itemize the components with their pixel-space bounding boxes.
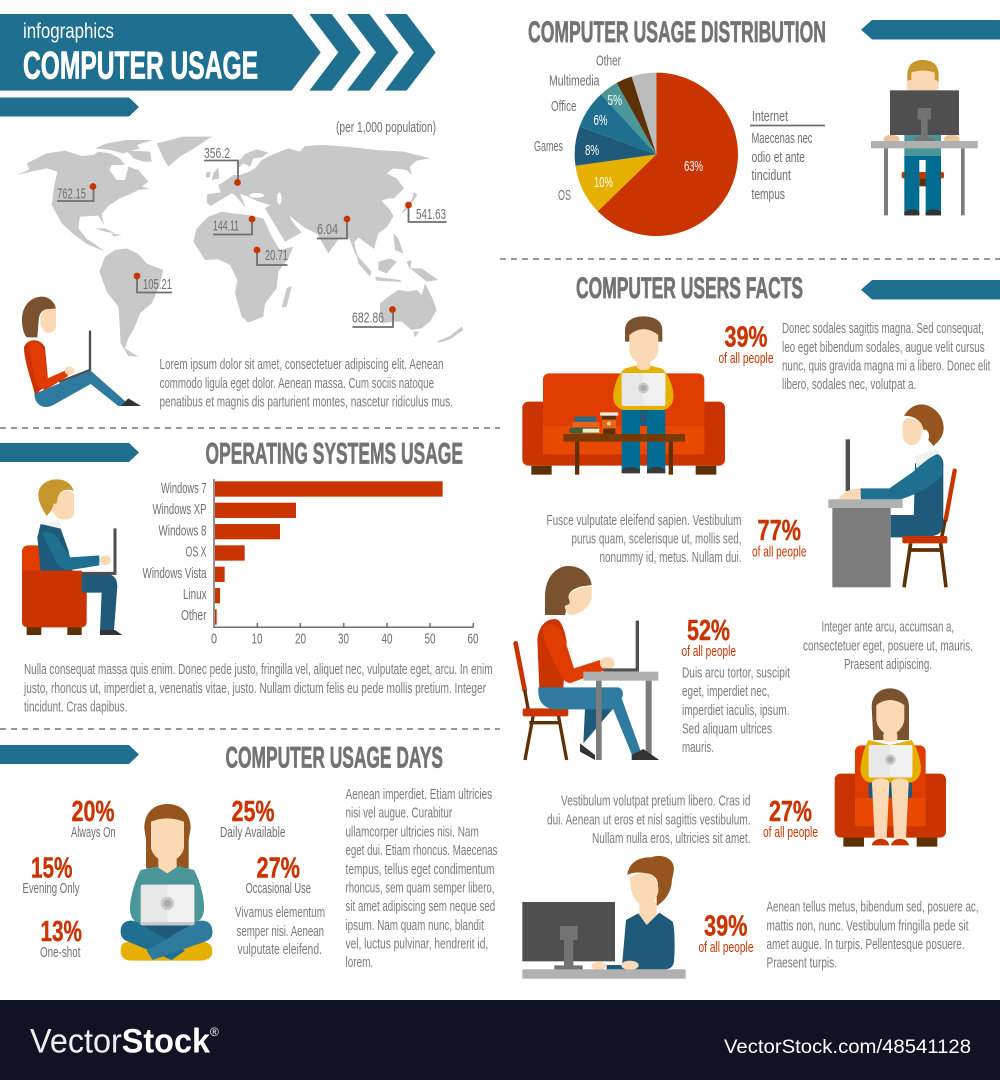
small desk paragraph <box>682 664 791 756</box>
operating systems paragraph: justo, rhoncus ut, imperdiet a, venenatis vitae, justo. Nullam dictum felis eu pede mollis pretium. Integer <box>23 680 486 697</box>
stat: 77% at desk: of all people <box>752 544 806 560</box>
axis labels: 20 <box>295 630 306 647</box>
category labels: Windows 7 <box>161 480 206 497</box>
axis labels: 40 <box>382 630 392 647</box>
stat: 27% in armchair: 27% <box>769 796 812 828</box>
usage days stats: Always On <box>71 824 116 841</box>
figure: man behind monitor at desk <box>871 60 978 215</box>
occasional use paragraph: vulputate eleifend. <box>238 941 322 958</box>
category labels: Other <box>181 607 207 624</box>
figure: man in armchair <box>22 479 122 635</box>
category labels: Windows XP <box>152 501 206 518</box>
heading: computer users facts: COMPUTER USERS FACTS <box>576 272 803 305</box>
pie slices <box>575 73 738 236</box>
monitor paragraph: Praesent turpis. <box>766 954 837 972</box>
operating systems paragraph <box>23 661 493 716</box>
usage days paragraph: sit amet adipiscing sem neque sed <box>346 898 495 915</box>
axis labels: 30 <box>338 630 349 647</box>
map markers <box>90 179 412 313</box>
figure: man on sofa with table <box>522 316 725 475</box>
integer paragraph: Praesent adipiscing. <box>844 656 932 673</box>
map paragraph: Lorem ipsum dolor sit amet, consectetuer adipiscing elit. Aenean <box>160 356 444 373</box>
slice values <box>585 92 703 191</box>
stat: 39% at monitor: 39% <box>704 911 748 943</box>
small desk paragraph: eget, imperdiet nec, <box>682 683 770 700</box>
map callout lines <box>57 160 446 327</box>
slice values: 63% <box>684 158 703 175</box>
category labels: Windows Vista <box>142 565 207 582</box>
sofa paragraph: libero, sodales nec, volutpat a. <box>782 376 916 393</box>
usage days paragraph: lorem. <box>346 954 373 971</box>
footer logo: VectorStock <box>30 1023 210 1061</box>
usage days paragraph: ipsum. Nam quam nunc, blandit <box>346 917 484 934</box>
slice values: 10% <box>594 174 613 191</box>
axis labels: 50 <box>424 630 436 647</box>
stat: 52% at small desk: 52% <box>687 615 730 647</box>
chart axes <box>214 479 474 628</box>
usage days stats: Occasional Use <box>246 880 311 897</box>
map values: 6.04 <box>317 221 338 238</box>
usage days paragraph: eget dui. Etiam rhoncus. Maecenas <box>346 842 498 859</box>
registered mark: ® <box>210 1025 219 1039</box>
internet legend: tempus <box>752 186 785 203</box>
category labels: Windows 8 <box>158 522 206 540</box>
slice names: Multimedia <box>549 72 600 90</box>
category labels: Linux <box>183 586 207 603</box>
figure: woman side view at small desk <box>516 566 659 760</box>
vestibulum paragraph: dui. Aenean ut eros et nisl sagittis vestibulum. <box>547 811 750 828</box>
figure: woman at monitor <box>522 856 686 979</box>
section tab: operating systems <box>0 443 139 462</box>
desk paragraph: purus quam, scelerisque ut, mollis sed, <box>572 530 742 548</box>
figure: man at grey desk <box>828 404 955 587</box>
usage days stats: Daily Available <box>220 824 286 841</box>
occasional use paragraph <box>235 904 325 958</box>
stat: 77% at desk <box>752 515 806 560</box>
axis labels <box>211 630 478 647</box>
slice values: 5% <box>608 92 622 109</box>
usage days stats <box>22 796 311 961</box>
usage days stats: Evening Only <box>22 880 80 897</box>
usage days paragraph: ullamcorper ultricies nisi. Nam <box>346 823 479 840</box>
usage days paragraph: vel, luctus pulvinar, hendrerit id, <box>346 936 488 953</box>
usage days stats: 13% <box>40 916 82 948</box>
section tab: distribution <box>861 20 1000 40</box>
slice names: Games <box>534 138 563 155</box>
title banner: COMPUTER USAGE <box>23 44 258 88</box>
stat: 39% on sofa: 39% <box>724 322 768 354</box>
operating systems paragraph: Nulla consequat massa quis enim. Donec pede justo, fringilla vel, aliquet nec, vulputate eget, arcu. In enim <box>24 661 492 678</box>
figure: woman with laptop on floor <box>22 297 141 407</box>
footer bar <box>0 1000 1000 1080</box>
slice values: 6% <box>594 112 608 129</box>
map paragraph: penatibus et magnis dis parturient montes, nascetur ridiculus mus. <box>160 394 453 410</box>
figure: woman in armchair with laptop <box>835 688 946 847</box>
usage days paragraph: rhoncus, sem quam semper libero, <box>346 880 494 896</box>
monitor paragraph <box>766 899 978 972</box>
occasional use paragraph: semper nisi. Aenean <box>236 923 324 940</box>
stat: 39% on sofa: of all people <box>718 350 774 367</box>
small desk paragraph: Duis arcu tortor, suscipit <box>682 664 791 682</box>
slice names: Other <box>596 52 621 70</box>
usage days stats: 15% <box>31 852 73 884</box>
map values: 541.63 <box>416 206 446 223</box>
usage days stats: 25% <box>232 796 275 828</box>
world map continents <box>17 137 463 357</box>
desk paragraph: nonummy id, metus. Nullam dui. <box>600 549 742 566</box>
axis labels: 60 <box>468 630 478 647</box>
map values: 20.71 <box>265 247 288 264</box>
world map panel <box>17 119 463 357</box>
usage days paragraph: tempus, tellus eget condimentum <box>346 861 494 878</box>
map values: 144.11 <box>213 218 239 235</box>
title banner: infographics <box>23 20 114 43</box>
small desk paragraph: imperdiet iaculis, ipsum. <box>682 702 790 719</box>
internet legend: Maecenas nec <box>752 130 813 147</box>
slice names: Office <box>551 98 576 115</box>
stat: 27% in armchair <box>763 796 818 841</box>
internet legend: tincidunt <box>752 167 792 184</box>
usage days paragraph <box>346 786 498 971</box>
integer paragraph <box>803 619 973 673</box>
heading: operating systems usage: OPERATING SYSTEMS USAGE <box>206 438 463 471</box>
operating systems paragraph: tincidunt. Cras dapibus. <box>24 698 128 716</box>
map values: 356.2 <box>204 145 230 162</box>
category labels <box>142 480 207 624</box>
bars <box>215 481 443 625</box>
pie chart: usage distribution <box>534 52 738 236</box>
internet legend <box>750 108 825 203</box>
vestibulum paragraph: Vestibulum volutpat pretium libero. Cras id <box>561 793 750 810</box>
map values: 682.86 <box>352 310 384 327</box>
axis labels: 0 <box>211 630 217 647</box>
bar chart: operating systems <box>142 479 478 647</box>
sofa paragraph <box>782 320 991 393</box>
vestibulum paragraph <box>547 793 750 847</box>
usage days stats: One-shot <box>40 944 81 961</box>
small desk paragraph: mauris. <box>682 739 714 756</box>
desk paragraph <box>546 512 742 566</box>
vestibulum paragraph: Nullam nulla eros, ultricies sit amet. <box>592 830 750 847</box>
desk paragraph: Fusce vulputate eleifend sapien. Vestibulum <box>546 512 742 529</box>
footer image id: VectorStock.com/48541128 <box>724 1037 971 1058</box>
usage days stats: 27% <box>256 852 300 884</box>
usage days paragraph: Aenean imperdiet. Etiam ultricies <box>346 786 492 803</box>
stat: 77% at desk: 77% <box>758 515 801 547</box>
map values: 105.21 <box>143 276 172 293</box>
map paragraph: commodo ligula eget dolor. Aenean massa. Cum sociis natoque <box>160 375 434 392</box>
section tab: usage days <box>0 745 139 764</box>
figure: woman cross-legged with laptop <box>121 804 213 961</box>
internet legend: odio et ante <box>752 149 805 166</box>
usage days stats: 20% <box>72 796 115 828</box>
slice values: 8% <box>585 142 599 159</box>
stat: 27% in armchair: of all people <box>763 824 818 841</box>
section tab: map <box>0 98 139 116</box>
map paragraph <box>160 356 453 410</box>
axis labels: 10 <box>252 630 262 647</box>
occasional use paragraph: Vivamus elementum <box>235 904 325 921</box>
map values: 762.15 <box>57 186 86 203</box>
map values <box>57 145 446 327</box>
small desk paragraph: Sed aliquam ultrices <box>682 720 772 738</box>
slice names: OS <box>558 187 571 204</box>
internet legend: Internet <box>752 108 789 125</box>
stat: 39% at monitor <box>698 911 754 956</box>
slice names <box>534 52 621 204</box>
heading: computer usage days: COMPUTER USAGE DAYS <box>226 742 443 775</box>
stat: 52% at small desk <box>682 615 736 660</box>
usage days paragraph: nisi vel augue. Curabitur <box>346 805 452 822</box>
title banner <box>0 14 436 91</box>
stat: 39% on sofa <box>718 322 774 367</box>
world map panel: (per 1,000 population) <box>336 119 436 136</box>
category labels: OS X <box>186 544 206 560</box>
stat: 52% at small desk: of all people <box>682 643 736 660</box>
stat: 39% at monitor: of all people <box>698 939 754 956</box>
section tab: users facts <box>861 280 1000 300</box>
